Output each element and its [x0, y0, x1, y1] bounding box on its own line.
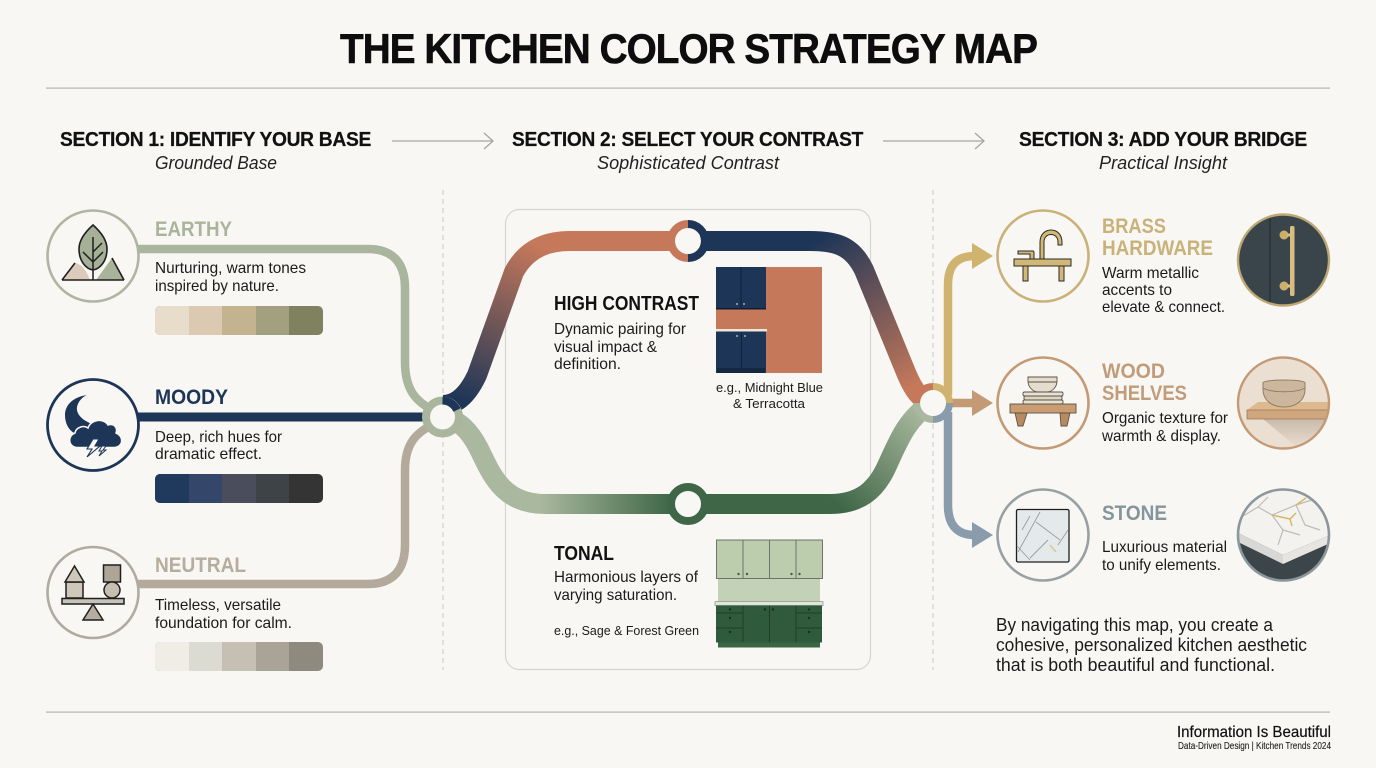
- text: high contrast: visual impact &: [554, 339, 657, 356]
- label: stone: Luxurious material: [1102, 539, 1227, 556]
- label: moody: MOODY: [155, 386, 228, 409]
- label: neutral: foundation for calm.: [155, 615, 292, 632]
- heading: section 1: Grounded Base: [155, 153, 277, 173]
- arrow: section 1 to section 2: [392, 133, 493, 149]
- label: neutral: NEUTRAL: [155, 554, 246, 577]
- text: tonal: Harmonious layers of: [554, 569, 699, 586]
- path: moody line: [138, 412, 430, 422]
- photo: marble countertop: [1236, 488, 1330, 582]
- arrow: to brass hardware: [948, 243, 993, 395]
- heading: section 2: [512, 128, 864, 173]
- caption: high contrast example: & Terracotta: [733, 396, 806, 411]
- heading: section 3: Practical Insight: [1099, 153, 1228, 173]
- label: stone: STONE: [1102, 502, 1167, 525]
- text: tonal: TONAL: [554, 543, 614, 565]
- label: brass hardware: BRASS: [1102, 215, 1166, 238]
- caption: high contrast example: e.g., Midnight Blue: [716, 380, 823, 395]
- heading: section 3: SECTION 3: ADD YOUR BRIDGE: [1019, 128, 1307, 151]
- closing statement: that is both beautiful and functional.: [996, 655, 1275, 675]
- heading: section 2: SECTION 2: SELECT YOUR CONTRAST: [512, 128, 864, 151]
- footer credit: [1177, 724, 1331, 752]
- label: moody: Deep, rich hues for: [155, 429, 283, 446]
- label: wood shelves: SHELVES: [1102, 382, 1187, 405]
- label: brass hardware: Warm metallic: [1102, 265, 1199, 282]
- hub: base junction: [426, 400, 459, 434]
- label: stone: to unify elements.: [1102, 557, 1221, 574]
- icon: moody: [48, 380, 138, 470]
- label: stone: [1102, 502, 1227, 574]
- text: tonal: varying saturation.: [554, 587, 677, 604]
- path: neutral line: [138, 425, 432, 584]
- footer credit: Data-Driven Design | Kitchen Trends 2024: [1178, 740, 1331, 752]
- hub: tonal: [671, 487, 705, 521]
- closing statement: cohesive, personalized kitchen aesthetic: [996, 635, 1307, 655]
- text: high contrast: HIGH CONTRAST: [554, 293, 699, 315]
- photo: brass pull handle: [1238, 210, 1330, 310]
- path: high contrast left: [443, 241, 675, 405]
- text: high contrast: [554, 293, 699, 373]
- text: high contrast: definition.: [554, 356, 621, 373]
- arrow: to wood shelves: [948, 390, 993, 416]
- label: earthy: [155, 218, 306, 295]
- illustration: midnight blue and terracotta kitchen: [716, 267, 822, 373]
- label: brass hardware: [1102, 215, 1225, 316]
- text: tonal: e.g., Sage & Forest Green: [554, 623, 699, 638]
- label: moody: [155, 386, 283, 463]
- icon: earthy: [48, 210, 138, 302]
- heading: section 2: Sophisticated Contrast: [597, 153, 780, 173]
- hub: bridge junction: [916, 386, 950, 420]
- label: earthy: EARTHY: [155, 218, 232, 241]
- heading: section 1: SECTION 1: IDENTIFY YOUR BASE: [60, 128, 371, 151]
- path: high contrast right: [700, 241, 933, 403]
- swatch: moody: [155, 474, 323, 503]
- icon: stone: [998, 490, 1088, 580]
- heading: section 1: [60, 128, 371, 173]
- text: tonal: [554, 543, 699, 638]
- label: neutral: [155, 554, 292, 632]
- path: earthy line: [138, 249, 432, 410]
- icon: neutral: [48, 547, 138, 638]
- path: tonal left: [443, 417, 675, 504]
- closing statement: [996, 615, 1307, 675]
- photo: wood shelf with bowl: [1238, 357, 1333, 450]
- caption: high contrast example: [716, 380, 823, 411]
- closing statement: By navigating this map, you create a: [996, 615, 1274, 635]
- icon: brass hardware: [998, 210, 1088, 302]
- label: earthy: inspired by nature.: [155, 278, 279, 295]
- label: wood shelves: [1101, 360, 1229, 445]
- label: moody: dramatic effect.: [155, 446, 262, 463]
- label: wood shelves: warmth & display.: [1101, 428, 1221, 445]
- swatch: neutral: [155, 642, 323, 671]
- text: high contrast: Dynamic pairing for: [554, 321, 687, 338]
- label: brass hardware: accents to: [1102, 282, 1172, 299]
- swatch: earthy: [155, 306, 323, 335]
- illustration: sage and forest green kitchen: [715, 540, 823, 648]
- footer credit: Information Is Beautiful: [1177, 724, 1331, 741]
- label: brass hardware: HARDWARE: [1102, 237, 1213, 260]
- hub: high contrast: [671, 224, 705, 258]
- label: wood shelves: Organic texture for: [1102, 410, 1229, 427]
- label: brass hardware: elevate & connect.: [1102, 299, 1225, 316]
- arrow: section 2 to section 3: [883, 133, 984, 149]
- label: neutral: Timeless, versatile: [155, 597, 281, 614]
- arrow: to stone: [948, 412, 993, 548]
- heading: section 3: [1019, 128, 1307, 173]
- label: earthy: Nurturing, warm tones: [155, 260, 306, 277]
- label: wood shelves: WOOD: [1102, 360, 1165, 383]
- icon: wood shelves: [998, 358, 1088, 448]
- panel: contrast options: [506, 210, 870, 670]
- title: THE KITCHEN COLOR STRATEGY MAP: [340, 25, 1037, 72]
- path: tonal right: [700, 404, 930, 504]
